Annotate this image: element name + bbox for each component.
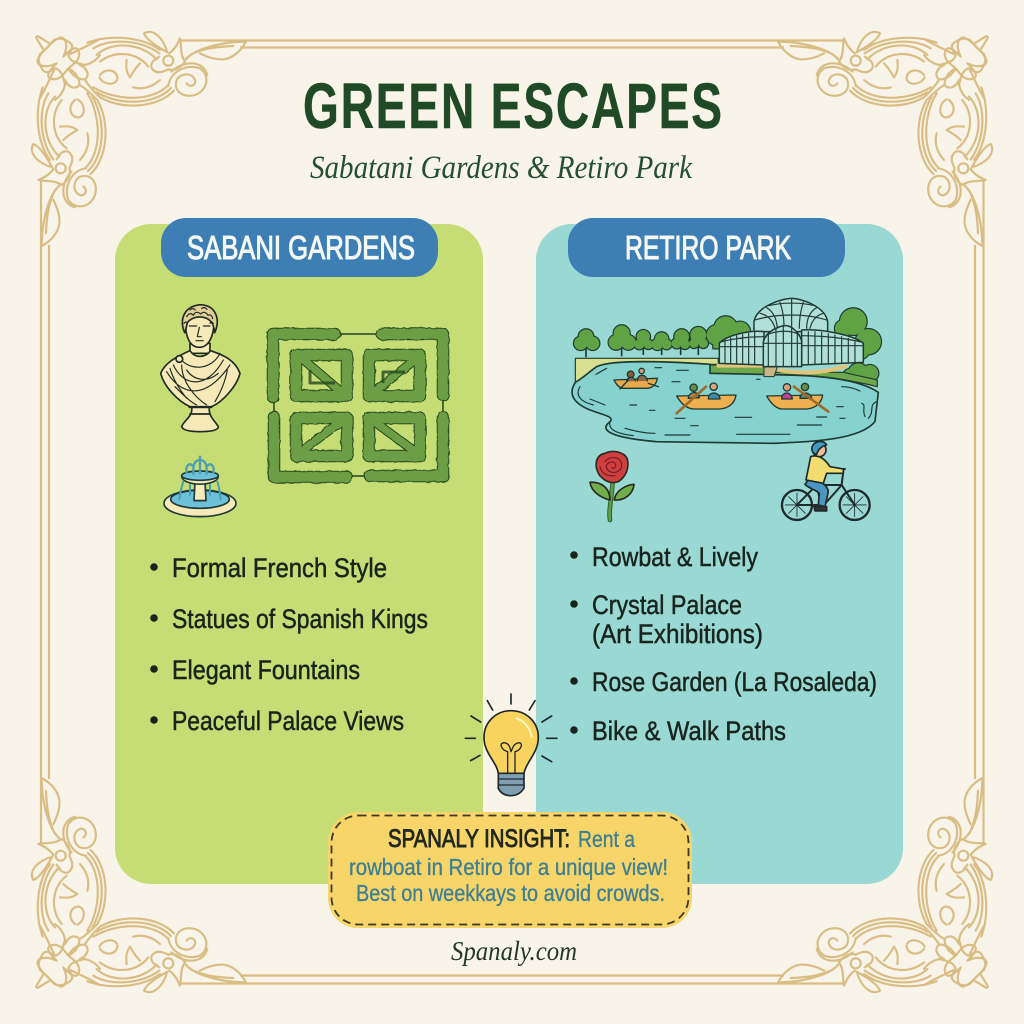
icon: marble bust	[161, 305, 240, 432]
bullet list: Sabani Gardens: Peaceful Palace Views	[172, 706, 404, 736]
bullet list: Retiro Park: Bike & Walk Paths	[592, 716, 786, 746]
callout: Spanaly insight: Rent a	[578, 826, 635, 852]
panel background	[115, 224, 483, 884]
lake	[572, 362, 878, 443]
bullet list: Sabani Gardens: Statues of Spanish Kings	[172, 604, 428, 634]
bullet list: Retiro Park: (Art Exhibitions)	[592, 619, 763, 649]
icon: light bulb	[465, 694, 557, 796]
panel: Sabani Gardens	[115, 218, 483, 884]
icon: fountain	[164, 457, 236, 517]
callout: Spanaly insight: Best on weekkays to avoid crowds.	[356, 880, 665, 906]
bullet list: Sabani Gardens: Elegant Fountains	[172, 655, 360, 685]
icon: rose	[590, 452, 634, 520]
callout: Spanaly insight	[328, 812, 692, 928]
callout: Spanaly insight: rowboat in Retiro for a unique view!	[349, 854, 668, 880]
panel: Retiro Park	[536, 218, 903, 884]
water ripples	[578, 368, 877, 436]
panel heading: SABANI GARDENS	[187, 229, 415, 266]
bullet list: Sabani Gardens: Formal French Style	[172, 553, 387, 583]
footer: website: Spanaly.com	[451, 936, 577, 966]
title: GREEN ESCAPES	[303, 71, 722, 142]
bullet list: Retiro Park	[570, 542, 877, 746]
panel heading	[568, 218, 845, 277]
illustration: lake, trees and Crystal Palace	[572, 298, 881, 443]
panel heading	[161, 218, 438, 277]
bullet list: Sabani Gardens	[150, 553, 428, 736]
callout: Spanaly insight: SPANALY INSIGHT:	[388, 825, 570, 853]
subtitle: Sabatani Gardens & Retiro Park	[310, 150, 693, 186]
panel background	[536, 224, 903, 884]
panel heading: RETIRO PARK	[625, 229, 791, 266]
Crystal Palace	[719, 298, 863, 367]
bullet list: Retiro Park: Rowbat & Lively	[592, 542, 758, 572]
icon: cyclist	[782, 441, 870, 520]
rowboats	[614, 368, 828, 413]
icon: formal hedge parterre	[273, 334, 443, 477]
lake shore	[575, 358, 718, 383]
trees	[574, 308, 881, 383]
bullet list: Retiro Park: Crystal Palace	[592, 590, 742, 620]
bullet list: Retiro Park: Rose Garden (La Rosaleda)	[592, 667, 877, 697]
